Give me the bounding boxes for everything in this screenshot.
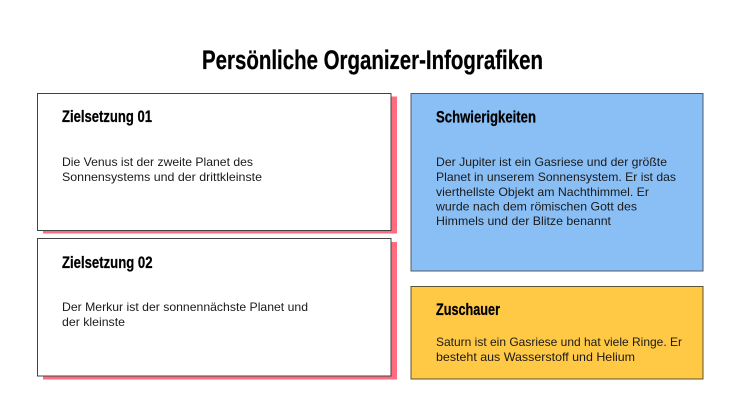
panel: Zuschauer xyxy=(411,286,703,379)
body text: Sonnensystems und der drittkleinste xyxy=(62,170,262,184)
body text xyxy=(62,300,308,329)
panel: Schwierigkeiten xyxy=(411,94,703,271)
body text: besteht aus Wasserstoff und Helium xyxy=(436,350,635,364)
heading: Zuschauer xyxy=(436,301,500,319)
card background xyxy=(411,286,703,379)
body text xyxy=(436,335,682,364)
heading: Schwierigkeiten xyxy=(436,108,536,126)
card background xyxy=(38,94,391,230)
card shadow xyxy=(43,242,397,380)
body text: Himmels und der Blitze benannt xyxy=(436,214,612,228)
heading: Zielsetzung 01 xyxy=(62,108,152,126)
body text: der kleinste xyxy=(62,315,125,329)
body text xyxy=(435,155,676,228)
card shadow xyxy=(43,96,397,234)
card background xyxy=(38,238,391,376)
body text: Der Jupiter ist ein Gasriese und der größte xyxy=(436,155,667,169)
panel: Zielsetzung 01 xyxy=(38,94,397,234)
card background xyxy=(411,94,703,271)
body text: Saturn ist ein Gasriese und hat viele Ringe. Er xyxy=(436,335,682,349)
panel: Zielsetzung 02 xyxy=(38,238,397,380)
body text: vierthellste Objekt am Nachthimmel. Er xyxy=(436,185,649,199)
title: Persönliche Organizer-Infografiken xyxy=(202,45,543,75)
body text: Planet in unserem Sonnensystem. Er ist das xyxy=(436,170,676,184)
body text: wurde nach dem römischen Gott des xyxy=(435,200,637,214)
body text: Der Merkur ist der sonnennächste Planet und xyxy=(62,300,308,314)
heading: Zielsetzung 02 xyxy=(62,254,152,272)
body text: Die Venus ist der zweite Planet des xyxy=(62,155,253,169)
body text xyxy=(62,155,262,184)
